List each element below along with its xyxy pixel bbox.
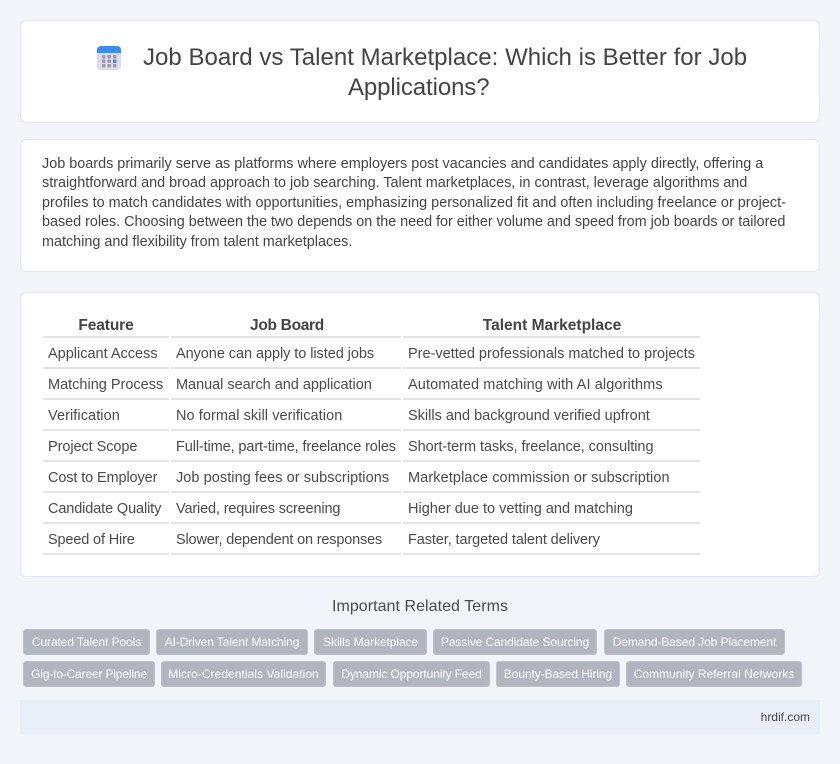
- row: Verification: Verification: [48, 408, 120, 424]
- tag group: related terms: Dynamic Opportunity Feed: [341, 667, 482, 681]
- row: Project Scope: Short-term tasks, freelance, consulting: [408, 439, 653, 455]
- footer source: hrdif.com: [761, 710, 810, 724]
- row: Speed of Hire: Speed of Hire: [48, 532, 135, 548]
- tag group: related terms: Curated Talent Pools: [32, 635, 141, 649]
- tag group: related terms: Passive Candidate Sourcing: [441, 635, 589, 649]
- text block: intro paragraph: [42, 156, 786, 250]
- tag group: related terms: AI-Driven Talent Matching: [165, 635, 299, 649]
- row: Speed of Hire: [48, 532, 600, 548]
- tag group: related terms: Demand-Based Job Placement: [613, 635, 776, 649]
- row: Candidate Quality: Candidate Quality: [48, 501, 161, 517]
- heading: Important Related Terms: Important Related Terms: [332, 598, 508, 615]
- row: Speed of Hire: Faster, targeted talent delivery: [408, 532, 600, 548]
- text block: intro paragraph: straightforward and broad approach to job searching. Talent marketplaces, in contrast, leverage algorithms and: [42, 175, 747, 191]
- row: Matching Process: Matching Process: [48, 377, 163, 393]
- tag group: related terms: Community Referral Networks: [634, 667, 794, 681]
- row: Applicant Access: Pre-vetted professionals matched to projects: [408, 346, 695, 362]
- tag group: related terms: Gig-to-Career Pipeline: [31, 667, 147, 681]
- panel: introduction text: [20, 139, 820, 272]
- row: Candidate Quality: Varied, requires screening: [176, 501, 340, 517]
- panel: title header: [20, 20, 820, 123]
- row: Verification: No formal skill verification: [176, 408, 342, 424]
- row: Cost to Employer: [48, 470, 670, 486]
- row: Matching Process: Manual search and application: [176, 377, 372, 393]
- tag group: related terms: Bounty-Based Hiring: [504, 667, 612, 681]
- row: Applicant Access: Anyone can apply to listed jobs: [176, 346, 374, 362]
- row: Verification: [48, 408, 650, 424]
- row: Speed of Hire: Slower, dependent on responses: [176, 532, 382, 548]
- table header: Talent Marketplace: [483, 317, 621, 334]
- row: Cost to Employer: Job posting fees or subscriptions: [176, 470, 389, 486]
- row: Verification: Skills and background verified upfront: [408, 408, 650, 424]
- row: Applicant Access: [48, 346, 695, 362]
- table header: Job Board: [250, 317, 324, 334]
- text block: intro paragraph: matching and flexibility from talent marketplaces.: [42, 234, 352, 250]
- text block: intro paragraph: profiles to match candidates with opportunities, emphasizing personalized fit and often including freelance or project-: [42, 195, 786, 211]
- row: Project Scope: [48, 439, 653, 455]
- text block: intro paragraph: based roles. Choosing between the two depends on the need for either volume and speed from job boards or tailored: [42, 214, 785, 230]
- text block: intro paragraph: Job boards primarily serve as platforms where employers post vacancies and candidates apply directly, offering a: [42, 156, 763, 172]
- row: Applicant Access: Applicant Access: [48, 346, 158, 362]
- title: [143, 44, 747, 101]
- title: Applications?: [348, 74, 489, 101]
- row: Cost to Employer: Marketplace commission or subscription: [408, 470, 670, 486]
- icon: calendar: [97, 46, 121, 70]
- row: Cost to Employer: Cost to Employer: [48, 470, 157, 486]
- tag group: related terms: [23, 629, 802, 687]
- row: Matching Process: Automated matching with AI algorithms: [408, 377, 663, 393]
- table header: [78, 317, 621, 334]
- row: Project Scope: Full-time, part-time, freelance roles: [176, 439, 396, 455]
- title: Job Board vs Talent Marketplace: Which is Better for Job: [143, 44, 747, 71]
- table header: Feature: [78, 317, 134, 334]
- row: Candidate Quality: Higher due to vetting and matching: [408, 501, 633, 517]
- panel: comparison table: [20, 292, 820, 577]
- tag group: related terms: Skills Marketplace: [323, 635, 418, 649]
- row: Matching Process: [48, 377, 663, 393]
- footer bar: [20, 700, 820, 734]
- row: Project Scope: Project Scope: [48, 439, 137, 455]
- row: Candidate Quality: [48, 501, 633, 517]
- tag group: related terms: Micro-Credentials Validation: [168, 667, 319, 681]
